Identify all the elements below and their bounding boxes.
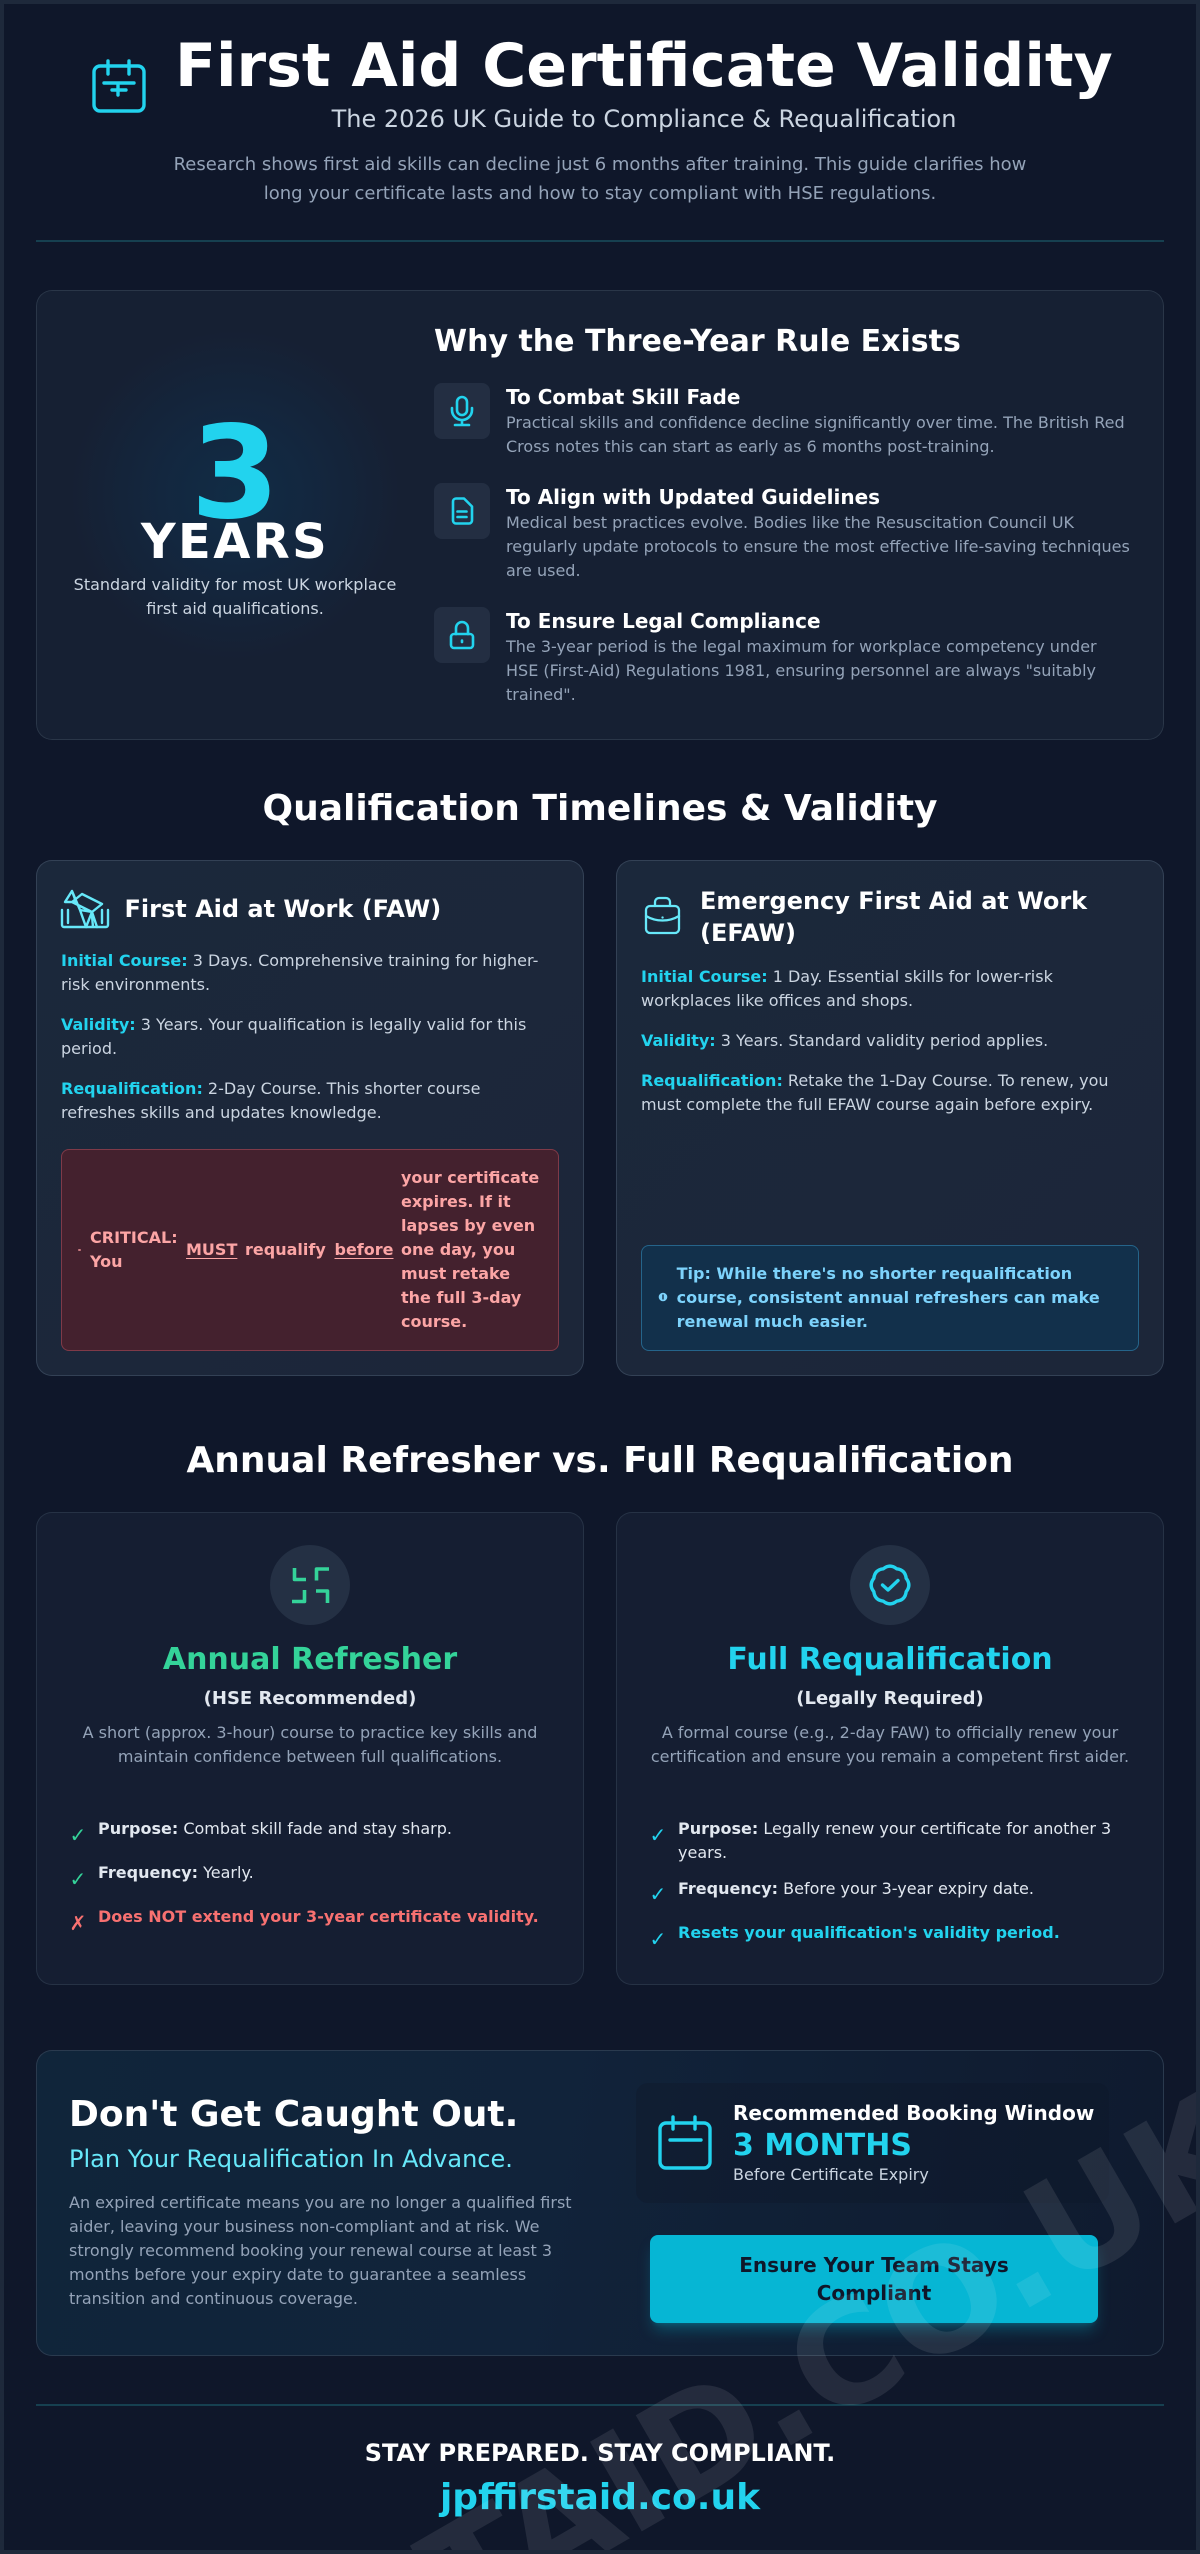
EFAW requalification: Requalification: Retake the 1-Day Course. To renew, you [641,1071,1109,1090]
big number 3: 3 [190,399,280,548]
icon: warning mark [78,1249,81,1251]
refresher description: A short (approx. 3-hour) course to practice key skills and [83,1722,537,1742]
must: MUST [186,1240,237,1258]
purpose: Purpose: Legally renew your certificate for another 3 [678,1818,1111,1838]
FAW requalification [61,1078,480,1122]
FAW initial course [61,950,538,994]
panel: call to action [36,2050,1164,2356]
heading: EFAW: Emergency First Aid at Work [700,887,1087,915]
expiry warning: one day, you [401,1240,515,1258]
EFAW initial course [641,967,1053,1010]
validity caption [74,574,396,618]
check icon: ✓ [70,1867,86,1891]
panel: three-year rule [36,290,1164,740]
expiry warning: your certificate [401,1168,539,1186]
intro text: Research shows first aid skills can decline just 6 months after training. This guide clarifies how [174,154,1026,175]
reason 2 text: are used. [506,561,581,580]
critical text: CRITICAL: [90,1228,178,1246]
footer tagline: STAY PREPARED. STAY COMPLIANT. [365,2439,835,2467]
icon: badge check [850,1545,930,1625]
reason 1 text: Practical skills and confidence decline significantly over time. The British Red [506,413,1125,432]
frequency: Frequency: Before your 3-year expiry date. [678,1878,1034,1898]
expiry warning: expires. If it [401,1192,511,1210]
check icon: ✓ [650,1823,666,1847]
tip text: course, consistent annual refreshers can make [677,1288,1100,1307]
reason 3 heading: To Ensure Legal Compliance [506,609,821,633]
panel: Full Requalification [616,1512,1164,1985]
tip text: renewal much easier. [677,1312,868,1331]
intro text [174,154,1026,204]
CTA body text [69,2192,572,2308]
tag: HSE recommended: (HSE Recommended) [204,1688,416,1709]
title: First Aid Certificate Validity [175,31,1113,101]
reason 1 text: Cross notes this can start as early as 6 months post-training. [506,437,995,456]
FAW validity [61,1014,526,1058]
warning line: Does NOT extend your 3-year certificate validity. [98,1906,539,1926]
validity caption: Standard validity for most UK workplace [74,574,396,594]
reason 1 heading: To Combat Skill Fade [506,385,740,409]
icon tile: lock [434,607,490,663]
icon tile: microphone [434,383,490,439]
FAW validity: Validity: 3 Years. Your qualification is legally valid for this [61,1014,526,1034]
FAW requalification: Requalification: 2-Day Course. This shorter course [61,1078,480,1098]
CTA body text: An expired certificate means you are no longer a qualified first [69,2192,572,2212]
FAW initial course: Initial Course: 3 Days. Comprehensive training for higher- [61,950,538,970]
heading: EFAW: (EFAW) [700,919,796,947]
booking window label: Recommended Booking Window [733,2101,1094,2125]
tag: legally required: (Legally Required) [796,1688,984,1709]
section heading: refresher vs requalification: Annual Refresher vs. Full Requalification [186,1440,1014,1481]
requalify: requalify [245,1240,326,1258]
requalification description [651,1722,1129,1766]
FAW validity: period. [61,1038,117,1058]
heading: FAW: First Aid at Work (FAW) [124,895,441,923]
reason 1 text [506,413,1125,456]
CTA body text: months before your expiry date to guarantee a seamless [69,2264,526,2284]
validity caption: first aid qualifications. [146,598,324,618]
heading: EFAW [700,887,1088,947]
critical text: You [90,1252,122,1270]
reason 3 text: The 3-year period is the legal maximum for workplace competency under [506,637,1097,656]
CTA body text: strongly recommend booking your renewal course at least 3 [69,2240,552,2260]
reset line: Resets your qualification's validity period. [678,1922,1060,1942]
icon: calendar with plus [92,59,146,113]
intro text: long your certificate lasts and how to stay compliant with HSE regulations. [264,183,936,204]
reason 3 text: trained". [506,685,576,704]
reason 3 text: HSE (First-Aid) Regulations 1981, ensuring personnel are always "suitably [506,661,1096,680]
purpose: years. [678,1842,727,1862]
refresher description [82,1722,537,1766]
icon: info dot [658,1292,668,1302]
CTA heading: Don't Get Caught Out. [69,2094,518,2134]
icon tile: document [434,483,490,539]
YEARS label: YEARS [141,514,329,570]
icon: open box with cube [60,890,110,928]
check icon: ✓ [650,1927,666,1951]
EFAW initial course: workplaces like offices and shops. [641,991,913,1010]
button [650,2235,1098,2323]
icon: briefcase [644,896,680,934]
panel: Emergency First Aid at Work [616,860,1164,1376]
subtitle: The 2026 UK Guide to Compliance & Requalification [332,105,956,133]
requalification description: A formal course (e.g., 2-day FAW) to officially renew your [662,1722,1118,1742]
expiry warning: the full 3-day [401,1288,521,1306]
cross icon: ✗ [70,1911,86,1935]
EFAW requalification [641,1071,1109,1114]
heading: why the rule exists: Why the Three-Year Rule Exists [434,324,961,359]
section heading: timelines: Qualification Timelines & Validity [262,788,938,829]
booking window box [636,2083,1109,2203]
requalification description: certification and ensure you remain a competent first aider. [651,1746,1129,1766]
button: Compliant [817,2281,931,2305]
CTA body text: transition and continuous coverage. [69,2288,358,2308]
before expiry caption: Before Certificate Expiry [733,2164,929,2184]
icon: collapse corners [270,1545,350,1625]
FAW requalification: refreshes skills and updates knowledge. [61,1102,382,1122]
panel: Annual Refresher [36,1512,584,1985]
three months value: 3 MONTHS [733,2128,912,2163]
purpose [678,1818,1111,1862]
check icon: ✓ [650,1882,666,1906]
expiry warning: must retake [401,1264,510,1282]
button: Ensure Your Team Stays [739,2253,1009,2277]
expiry warning [401,1168,539,1330]
footer website: jpffirstaid.co.uk [440,2476,760,2518]
EFAW validity: Validity: 3 Years. Standard validity period applies. [641,1031,1048,1050]
callout: critical warning [61,1149,559,1351]
tip text [676,1264,1100,1331]
CTA subheading: Plan Your Requalification In Advance. [69,2145,513,2173]
reason 3 text [506,637,1097,704]
reason 2 text: regularly update protocols to ensure the most effective life-saving techniques [506,537,1130,556]
EFAW initial course: Initial Course: 1 Day. Essential skills for lower-risk [641,967,1053,986]
reason 2 text [506,513,1130,580]
EFAW requalification: must complete the full EFAW course again before expiry. [641,1095,1093,1114]
reason 2 text: Medical best practices evolve. Bodies like the Resuscitation Council UK [506,513,1074,532]
before: before [334,1240,394,1258]
purpose: Purpose: Combat skill fade and stay sharp. [98,1818,452,1838]
icon: calendar [658,2115,712,2170]
frequency: Frequency: Yearly. [98,1862,254,1882]
heading: annual refresher: Annual Refresher [163,1642,457,1677]
CTA body text: aider, leaving your business non-compliant and at risk. We [69,2216,540,2236]
heading: full requalification: Full Requalification [727,1642,1053,1677]
callout: tip [641,1245,1139,1351]
FAW initial course: risk environments. [61,974,210,994]
refresher description: maintain confidence between full qualifications. [118,1746,502,1766]
reason 2 heading: To Align with Updated Guidelines [506,485,880,509]
panel: First Aid at Work [36,860,584,1376]
expiry warning: course. [401,1312,467,1330]
check icon: ✓ [70,1823,86,1847]
expiry warning: lapses by even [401,1216,535,1234]
critical text [90,1228,178,1270]
tip text: Tip: While there's no shorter requalification [677,1264,1072,1283]
